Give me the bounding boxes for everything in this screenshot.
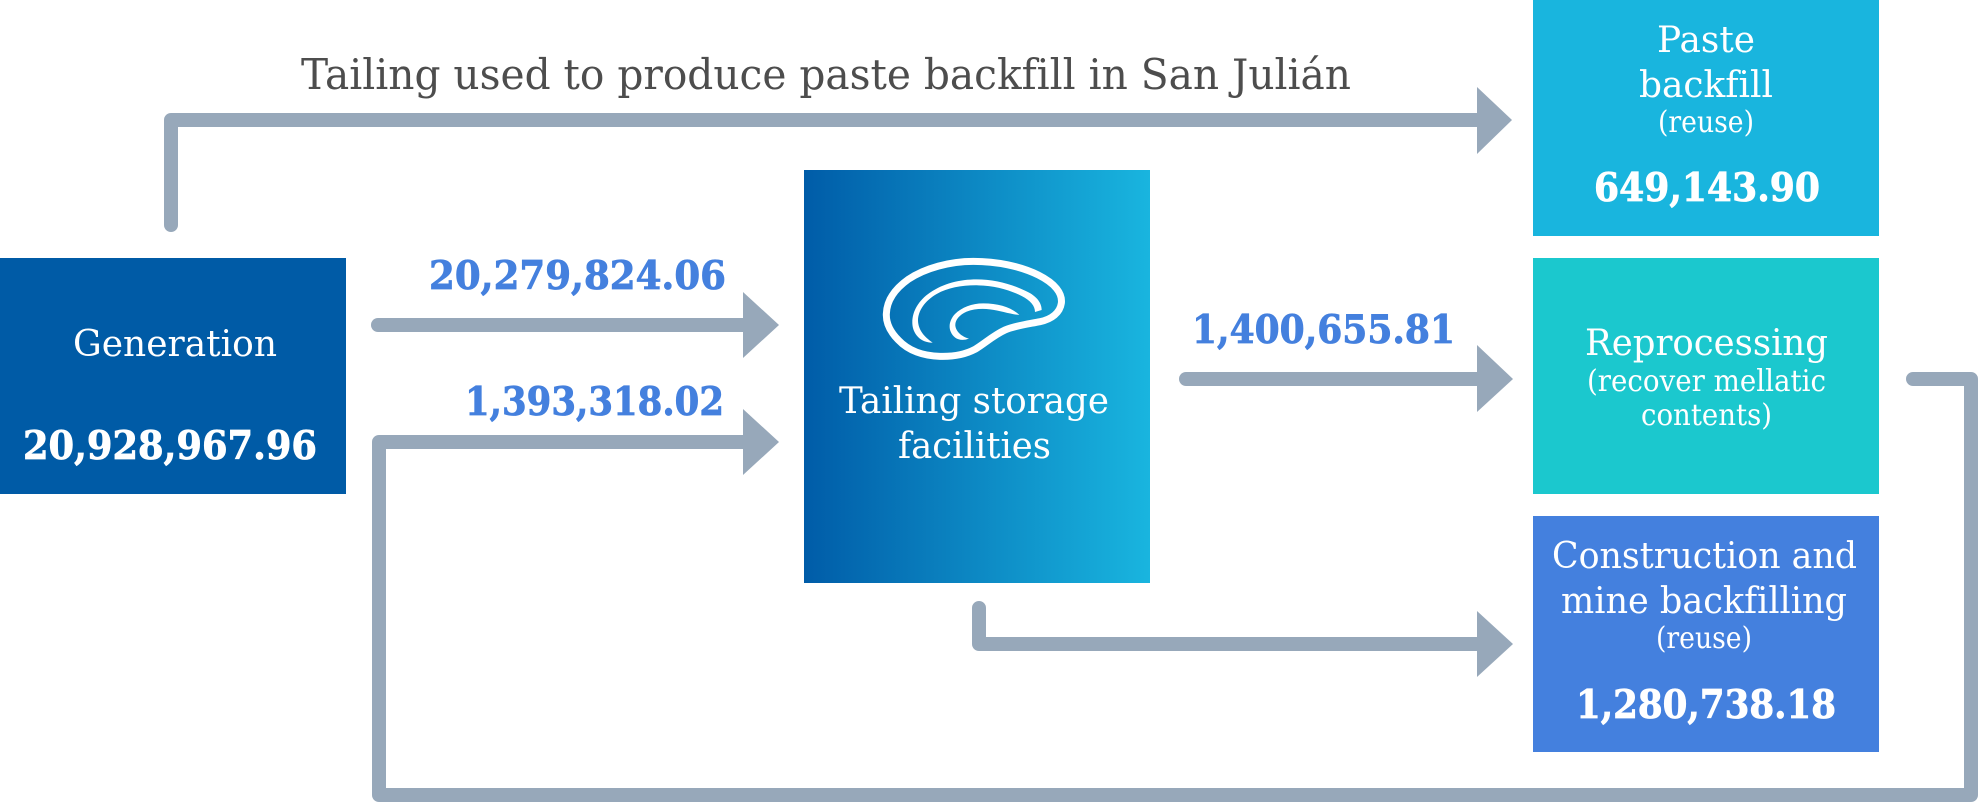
arrow: generation to paste backfill xyxy=(171,87,1512,225)
panel: reprocessing: Reprocessing xyxy=(1585,321,1828,364)
panel: generation: Generation xyxy=(73,322,277,365)
icon: tailing pond xyxy=(886,261,1061,356)
panel: reprocessing xyxy=(1533,258,1879,494)
panel: construction and mine backfilling: mine backfilling xyxy=(1561,579,1847,622)
panel: construction and mine backfilling: 1,280,738.18 xyxy=(1576,682,1836,728)
panel: reprocessing: (recover mellatic xyxy=(1587,364,1826,399)
arrow: storage to reprocessing xyxy=(1186,345,1513,412)
panel: tailing storage facilities: Tailing storage xyxy=(839,379,1109,422)
panel: construction and mine backfilling: Construction and xyxy=(1552,534,1857,577)
panel: paste backfill: Paste xyxy=(1657,18,1755,61)
panel: paste backfill: (reuse) xyxy=(1658,105,1754,140)
panel: construction and mine backfilling xyxy=(1533,516,1879,752)
heading: tailing used to produce paste backfill: Tailing used to produce paste backfill in San Julián xyxy=(301,50,1351,99)
panel: paste backfill xyxy=(1533,0,1879,236)
arrow: generation to storage xyxy=(378,292,779,358)
arrow: reprocessing return to storage xyxy=(379,379,1971,795)
panel: tailing storage facilities xyxy=(804,170,1150,583)
panel: generation xyxy=(0,258,346,494)
panel: reprocessing: contents) xyxy=(1641,398,1772,433)
value: generation to storage: 20,279,824.06 xyxy=(429,253,726,299)
arrow: storage to construction and mine backfilling xyxy=(979,608,1513,677)
value: storage to reprocessing: 1,400,655.81 xyxy=(1192,307,1455,353)
panel: generation: 20,928,967.96 xyxy=(23,423,317,469)
panel: construction and mine backfilling: (reuse) xyxy=(1656,621,1752,656)
panel: tailing storage facilities: facilities xyxy=(898,424,1051,467)
value: reprocessing return: 1,393,318.02 xyxy=(465,379,724,425)
panel: paste backfill: 649,143.90 xyxy=(1594,165,1820,211)
panel: paste backfill: backfill xyxy=(1639,63,1773,106)
